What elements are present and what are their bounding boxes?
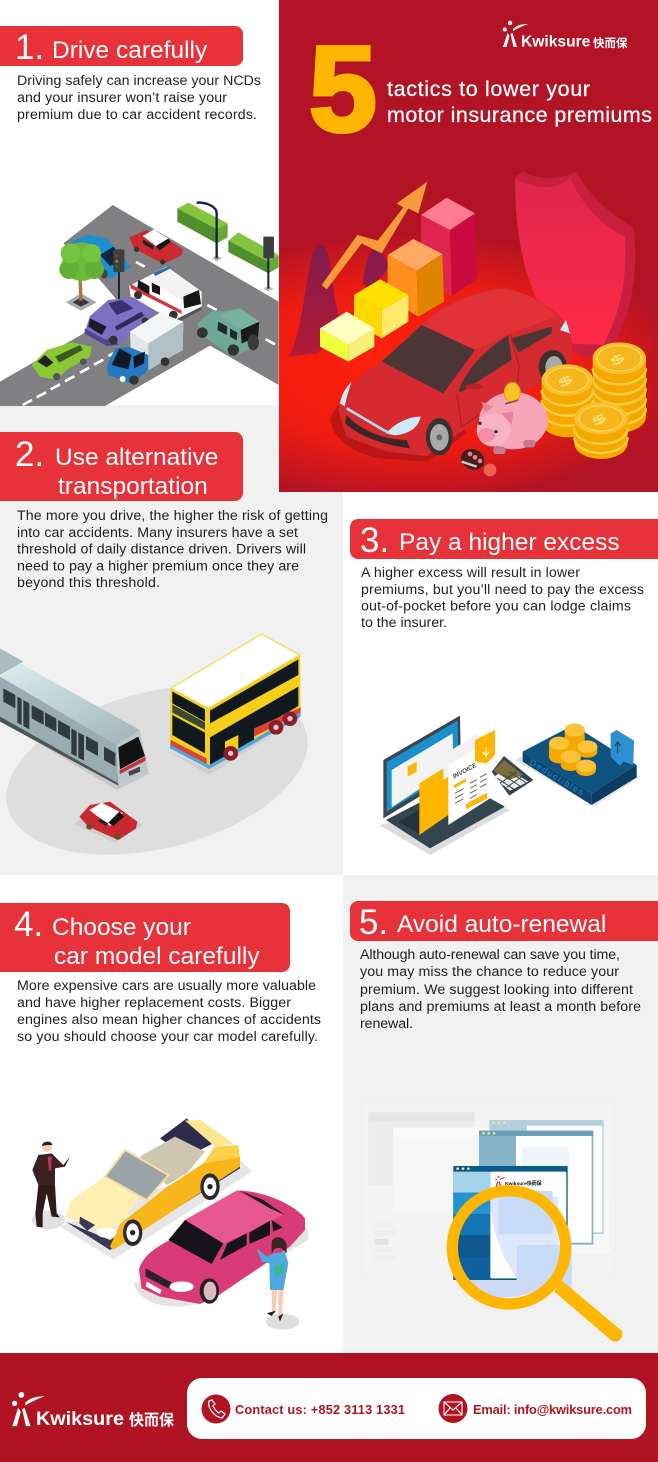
lens tint [458,1191,572,1297]
red car [330,288,572,462]
body text 3: A higher excess will result in lower [361,565,580,581]
heading banner 5: Avoid auto-renewal [397,911,606,938]
tree [59,242,104,311]
illustration: car buyers [32,1118,309,1330]
background hills [288,244,390,357]
logo: kwiksure header [503,21,628,50]
back browser window [479,1120,604,1245]
body text 4 [17,978,321,1045]
heading banner 5 [350,901,658,942]
body text 2: beyond this threshold. [17,575,160,591]
body text 1: and your insurer won’t raise your [17,90,227,106]
body text 5: Although auto-renewal can save you time, [360,947,620,963]
illustration: train, bus and taxi [0,634,325,883]
body text 5: you may miss the chance to reduce your [360,964,619,980]
illustration: car, chart, piggy bank and coins [288,172,646,476]
piggy bank [477,382,548,454]
illustration: laptop, invoice and deductibles [379,716,641,855]
body text 4: More expensive cars are usually more valuable [17,978,316,994]
footer [0,1353,658,1462]
hero title: motor insurance premiums [387,103,652,127]
laptop [383,716,505,848]
ambulance [129,266,202,324]
panel: tip 1 drive carefully [0,26,279,406]
faded background windows [361,1104,615,1274]
rising arrow [322,182,427,289]
body text 2 [17,508,328,591]
contact email text: Email: info@kwiksure.com [473,1402,632,1417]
taxi [129,229,183,265]
illustration: browser windows and magnifier [361,1104,622,1342]
panel: tip 3 pay a higher excess [350,519,658,855]
jeep [197,308,260,357]
logo: kwiksure header: 快而保 [593,36,628,50]
heading banner 2: transportation [58,473,208,500]
folder [419,752,470,835]
heading banner 1: Drive carefully [52,37,208,64]
deductibles platform: Deductibles [528,757,586,798]
body text 3: out-of-pocket before you can lodge claims [361,598,631,614]
invoice paper: INVOICE [452,762,479,780]
hedges [177,203,279,273]
green car [32,342,92,380]
heading banner 4: 4. [14,905,43,944]
body text 2: threshold of daily distance driven. Drivers will [17,542,306,558]
body text 4: and have higher replacement costs. Bigger [17,995,291,1011]
contact phone text: Contact us: +852 3113 1331 [235,1402,405,1417]
body text 1: premium due to car accident records. [17,107,257,123]
heading banner 2: 2. [15,435,44,474]
yellow convertible [65,1118,240,1250]
car keys [458,445,496,476]
heading banner 3 [350,519,658,560]
traffic light left [113,249,124,300]
front browser window [453,1166,568,1280]
illustration: road junction with cars [0,203,279,406]
logo: kwiksure footer: Kwiksure [36,1408,124,1430]
coin stacks: $ [556,372,575,391]
coin stacks: $ [608,351,627,369]
body text 2: need to pay a higher premium once they are [17,558,299,574]
woman with folder [257,1237,299,1330]
shield [515,172,635,357]
body text 3: premiums, but you’ll need to pay the excess [361,582,644,598]
blue up arrow tag [611,730,634,766]
traffic light right [263,237,274,291]
body text 1 [17,73,261,123]
deductibles platform [523,725,637,805]
body text 4: so you should choose your car model carefully. [17,1029,318,1045]
double-decker bus [167,634,302,775]
calculator [492,756,533,796]
icon: envelope [438,1394,468,1423]
icon: phone [202,1394,230,1424]
coin stacks: $ [590,411,609,429]
hero title: tactics to lower your [387,77,590,101]
body text 2: The more you drive, the higher the risk of getting [17,508,328,524]
body text 3: to the insurer. [361,615,447,631]
body text 1: Driving safely can increase your NCDs [17,73,261,89]
panel: tip 5 avoid auto-renewal [350,901,658,1342]
body text 3 [361,565,644,631]
small taxi [74,802,143,843]
heading banner 2: Use alternative [55,444,218,471]
blue car [63,234,131,279]
heading banner 4: car model carefully [54,943,260,970]
heading banner 1: 1. [15,28,44,67]
heading banner 2 [0,432,243,501]
panel: tip 4 choose your car model [0,903,321,1330]
body text 5: renewal. [360,1016,413,1032]
logo: kwiksure footer: 快而保 [129,1411,174,1429]
heading banner 3: 3. [360,521,389,560]
logo: kwiksure footer [12,1392,174,1430]
front browser window: Kwiksure快而保 [505,1180,542,1187]
body text 5: premium. We suggest looking into different [360,982,633,998]
heading banner 4: Choose your [52,914,191,941]
body text 5: plans and premiums at least a month before [360,999,641,1015]
body text 4: engines also mean higher chances of accidents [17,1012,321,1028]
street lamp [197,203,222,261]
bar chart blocks [320,198,477,362]
panel: hero [279,0,658,492]
heading banner 3: Pay a higher excess [399,529,620,556]
contact panel [187,1378,646,1439]
hero title [387,77,652,127]
man in suit [32,1142,72,1229]
purple car [84,297,157,346]
heading banner 5: 5. [359,903,388,942]
train [0,648,150,790]
heading banner 4 [0,903,290,972]
coin stacks [542,342,646,459]
magnifying glass [452,1191,622,1342]
pink sedan [134,1191,309,1306]
logo: kwiksure header: Kwiksure [521,34,591,50]
delivery truck [107,313,183,385]
panel: tip 2 alternative transportation [0,432,328,883]
body text 2: into car accidents. Many insurers have a set [17,525,298,541]
invoice paper [443,730,495,825]
big number 5: 5 [309,21,377,157]
body text 5 [360,947,641,1032]
coin stacks small [549,723,597,776]
heading banner 1 [0,26,243,67]
